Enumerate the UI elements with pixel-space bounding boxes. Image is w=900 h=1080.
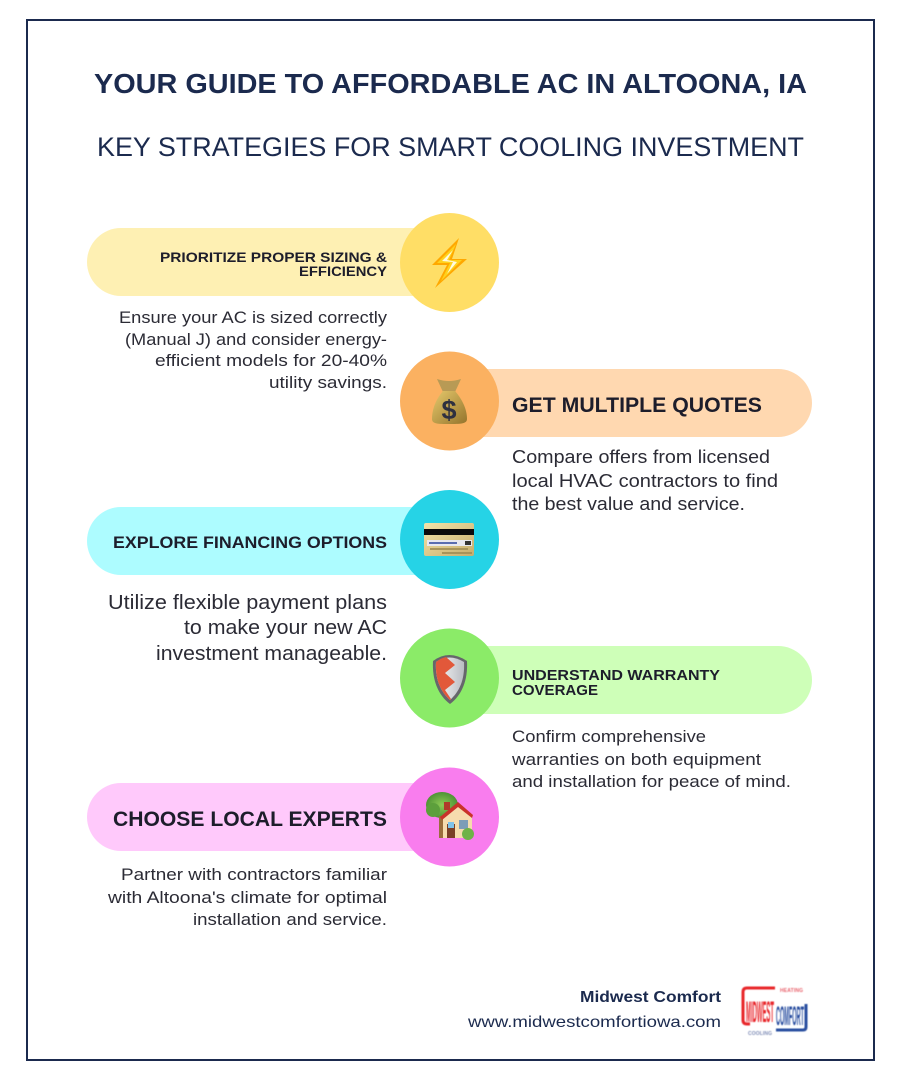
description: warranty: and installation for peace of mind. [512,772,791,791]
heading: warranty: COVERAGE [512,682,598,699]
logo: COOLING [748,1031,772,1037]
description: local experts: with Altoona's climate for optimal [107,888,387,907]
heading: financing: EXPLORE FINANCING OPTIONS [113,533,387,552]
description: sizing: Ensure your AC is sized correctly [119,308,388,327]
description: warranty: warranties on both equipment [511,750,761,769]
description: quotes: the best value and service. [512,494,745,514]
title: YOUR GUIDE TO AFFORDABLE AC IN ALTOONA, IA [94,68,807,99]
panel: prioritize proper sizing [87,213,499,392]
description: sizing: utility savings. [269,373,387,392]
description: sizing: (Manual J) and consider energy- [125,330,387,349]
description: quotes: local HVAC contractors to find [512,471,778,491]
description: financing: investment manageable. [156,643,387,665]
heading: local experts: CHOOSE LOCAL EXPERTS [113,808,387,831]
icon circle: lightning bolt [400,213,499,312]
icon circle: shield [400,628,499,728]
panel: choose local experts [87,768,499,929]
description: warranty: Confirm comprehensive [512,727,706,746]
icon circle: money bag [400,352,499,450]
heading: warranty: UNDERSTAND WARRANTY [512,667,720,684]
icon circle: credit card [400,490,499,589]
description: financing: to make your new AC [184,617,387,639]
heading: quotes: GET MULTIPLE QUOTES [512,394,762,417]
description: sizing: efficient models for 20-40% [155,351,387,370]
brand name: Midwest Comfort [580,989,722,1006]
description: financing: Utilize flexible payment plans [108,592,387,614]
description: quotes: Compare offers from licensed [512,447,770,467]
subtitle: KEY STRATEGIES FOR SMART COOLING INVESTMENT [97,132,804,162]
heading: sizing: PRIORITIZE PROPER SIZING & [160,249,387,265]
banner: warranty [450,646,812,714]
banner: quotes [450,369,812,437]
logo: HEATING [780,988,803,994]
banner: sizing [87,228,449,296]
panel: get multiple quotes [400,352,812,514]
icon circle: house with tree [400,768,499,866]
panel: explore financing options [87,490,499,665]
website: www.midwestcomfortiowa.com [467,1014,721,1031]
panel: understand warranty coverage [400,628,812,791]
logo [743,988,806,1037]
description: local experts: Partner with contractors familiar [121,865,387,884]
icon circle: money bag: $ [441,395,457,425]
heading: sizing: EFFICIENCY [299,263,388,279]
footer brand [467,988,806,1037]
banner: local experts [87,783,449,851]
banner: financing [87,507,449,575]
description: local experts: installation and service. [193,910,387,929]
text: MIDWEST [746,996,774,1029]
